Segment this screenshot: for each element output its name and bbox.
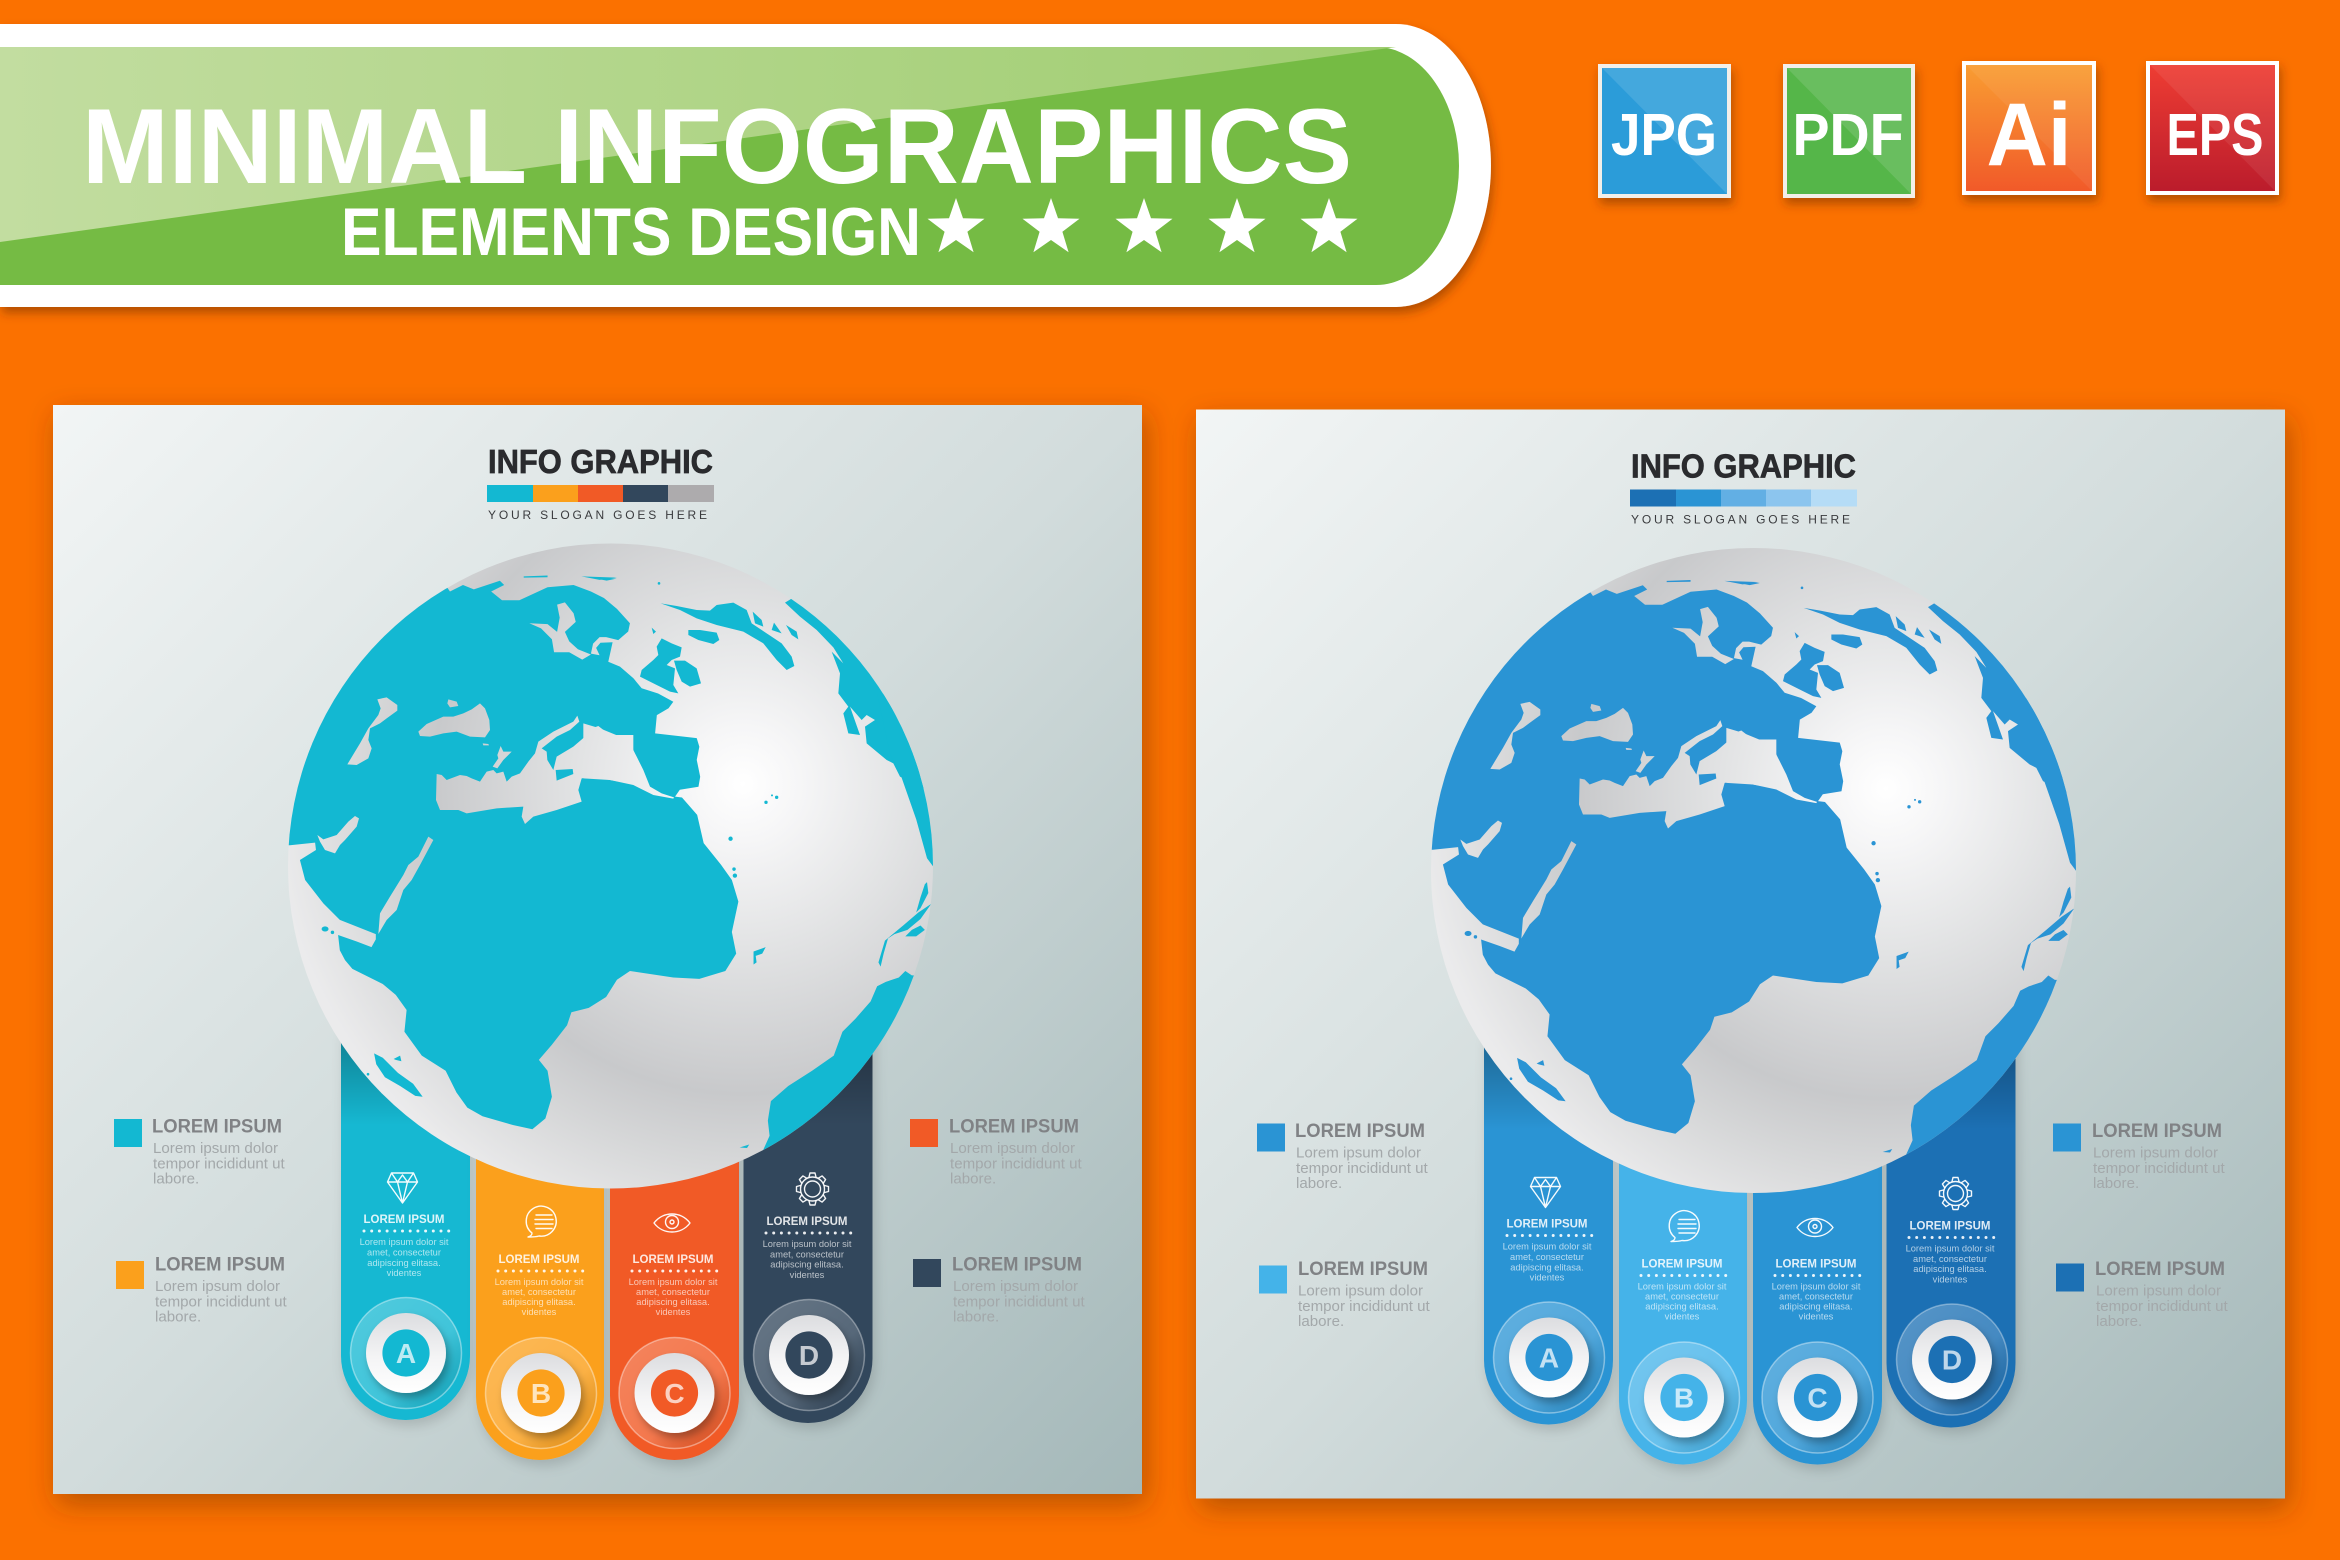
legend item: orange: labore. <box>155 1308 201 1326</box>
badge B <box>1628 1342 1740 1453</box>
icon: eye <box>1797 1218 1833 1236</box>
pill D text <box>1906 1218 1995 1284</box>
legend item: mid blue <box>1257 1121 1429 1192</box>
pill B text: LOREM IPSUM <box>498 1252 580 1266</box>
pill B text: amet, consectetur <box>1645 1292 1719 1302</box>
pill C <box>610 1100 739 1460</box>
legend item: dark blue: LOREM IPSUM <box>2095 1259 2225 1280</box>
panel background <box>53 405 1142 1494</box>
icon: Ai file badge <box>1962 61 2096 195</box>
pill A text: adipiscing elitasa. <box>367 1258 441 1268</box>
pill D text: adipiscing elitasa. <box>1913 1264 1987 1274</box>
banner white frame <box>0 24 1491 307</box>
legend item: teal: LOREM IPSUM <box>152 1116 282 1138</box>
badge C <box>619 1338 730 1448</box>
pill D text <box>763 1214 852 1280</box>
badge A: A <box>396 1338 416 1369</box>
pill D text: videntes <box>790 1270 825 1280</box>
badge B: B <box>1674 1382 1694 1414</box>
pill A text: videntes <box>387 1268 422 1278</box>
icon: diamond <box>1530 1178 1560 1208</box>
pill C text: amet, consectetur <box>636 1287 710 1297</box>
legend item: mid blue: LOREM IPSUM <box>1295 1121 1425 1142</box>
legend item: teal: labore. <box>153 1170 199 1188</box>
legend item: orange: LOREM IPSUM <box>155 1254 285 1276</box>
colour bar <box>487 485 714 502</box>
legend item: orange: tempor incididunt ut <box>155 1294 288 1310</box>
legend item: dark blue: tempor incididunt ut <box>2096 1298 2229 1315</box>
legend item: light blue <box>1259 1259 1431 1330</box>
pill A text <box>1503 1216 1592 1282</box>
badge A <box>350 1298 462 1408</box>
pill A text: Lorem ipsum dolor sit <box>1503 1242 1592 1252</box>
icon: JPG file badge <box>1598 64 1731 198</box>
pill A text: videntes <box>1530 1272 1565 1282</box>
pill C text: amet, consectetur <box>1779 1292 1853 1302</box>
legend item: dark blue: Lorem ipsum dolor <box>2096 1282 2221 1300</box>
pill C <box>1753 1104 1882 1464</box>
pill A <box>341 1030 470 1420</box>
legend item: mid blue: Lorem ipsum dolor <box>1296 1144 1421 1162</box>
pill B text: amet, consectetur <box>502 1287 576 1297</box>
legend item: blue: LOREM IPSUM <box>2092 1121 2222 1142</box>
panel: blue monochrome infographic <box>1196 410 2285 1498</box>
legend item: teal: Lorem ipsum dolor <box>153 1140 278 1157</box>
pill B <box>1619 1104 1747 1464</box>
panel heading: INFO GRAPHIC <box>1631 448 1856 484</box>
badge C <box>1762 1342 1873 1453</box>
legend item: dark blue <box>2056 1259 2229 1330</box>
legend item: blue <box>2053 1121 2226 1192</box>
pill D text: Lorem ipsum dolor sit <box>763 1239 852 1249</box>
badge B: B <box>531 1378 551 1409</box>
pill D text: videntes <box>1933 1274 1968 1284</box>
pill A text <box>360 1212 449 1278</box>
pill A text: adipiscing elitasa. <box>1510 1262 1584 1272</box>
pill C text: adipiscing elitasa. <box>636 1297 710 1307</box>
banner green body <box>0 47 1459 285</box>
legend item: blue: tempor incididunt ut <box>2093 1160 2226 1177</box>
slogan: YOUR SLOGAN GOES HERE <box>488 508 707 522</box>
icon: PDF file badge: PDF <box>1792 102 1904 168</box>
icon: diamond <box>388 1173 418 1203</box>
pill B text <box>1638 1256 1727 1322</box>
pill C text <box>1772 1256 1861 1322</box>
legend item: blue: labore. <box>2093 1175 2139 1192</box>
badge D <box>1896 1304 2008 1415</box>
legend item: teal <box>114 1116 286 1188</box>
legend item: navy: tempor incididunt ut <box>953 1294 1086 1310</box>
colour bar <box>1630 490 1857 506</box>
legend item: orange <box>116 1254 288 1326</box>
panel background <box>1196 410 2285 1498</box>
pill C text: LOREM IPSUM <box>1776 1256 1856 1270</box>
badge B <box>486 1338 596 1448</box>
icon: gear <box>1940 1178 1972 1210</box>
pill C text: LOREM IPSUM <box>632 1252 714 1266</box>
pill C text: videntes <box>1799 1312 1834 1322</box>
icon: speech bubble <box>526 1206 556 1237</box>
globe <box>270 520 986 1197</box>
badge D: D <box>1942 1344 1962 1376</box>
pill B text <box>495 1252 584 1317</box>
pill B text: Lorem ipsum dolor sit <box>1638 1282 1727 1292</box>
icon: Ai file badge: Ai <box>1986 84 2072 184</box>
icon: JPG file badge: JPG <box>1611 102 1717 168</box>
icon: EPS file badge: EPS <box>2166 102 2264 168</box>
pill C text: Lorem ipsum dolor sit <box>629 1277 718 1287</box>
pill B text: adipiscing elitasa. <box>1645 1302 1719 1312</box>
legend item: navy: labore. <box>953 1308 999 1326</box>
panel: teal multicolor infographic <box>53 405 1142 1494</box>
badge A <box>1494 1302 1604 1413</box>
pill D text: LOREM IPSUM <box>766 1214 848 1228</box>
legend item: navy: LOREM IPSUM <box>952 1254 1082 1276</box>
legend item: red <box>910 1116 1083 1188</box>
legend item: red: tempor incididunt ut <box>950 1156 1083 1172</box>
icon: gear <box>796 1173 828 1205</box>
legend item: dark blue: labore. <box>2096 1313 2142 1330</box>
legend item: red: labore. <box>950 1170 996 1188</box>
pill A <box>1484 1034 1613 1424</box>
pill B text: videntes <box>1665 1312 1700 1322</box>
banner gloss <box>0 47 1396 242</box>
legend item: navy: Lorem ipsum dolor <box>953 1278 1078 1295</box>
pill D text: amet, consectetur <box>1913 1254 1987 1264</box>
title banner <box>0 24 1491 307</box>
badge D <box>754 1300 864 1410</box>
legend item: mid blue: labore. <box>1296 1175 1342 1192</box>
badge C: C <box>1807 1382 1828 1414</box>
legend item: light blue: tempor incididunt ut <box>1298 1298 1431 1315</box>
legend item: navy <box>913 1254 1086 1326</box>
badge D: D <box>799 1340 819 1371</box>
pill D <box>744 1030 872 1423</box>
legend item: light blue: LOREM IPSUM <box>1298 1259 1428 1280</box>
pill A text: amet, consectetur <box>367 1248 441 1258</box>
five stars <box>928 198 1358 252</box>
pill C text <box>629 1252 718 1317</box>
pill C text: videntes <box>656 1307 691 1317</box>
legend item: mid blue: tempor incididunt ut <box>1296 1160 1429 1177</box>
globe <box>1413 524 2129 1201</box>
pill A text: Lorem ipsum dolor sit <box>360 1237 449 1247</box>
badge C: C <box>664 1378 685 1409</box>
pill D <box>1886 1034 2016 1428</box>
badge A: A <box>1539 1342 1559 1374</box>
panel heading: INFO GRAPHIC <box>488 443 713 480</box>
pill B text: Lorem ipsum dolor sit <box>495 1277 584 1287</box>
pill A text: amet, consectetur <box>1510 1252 1584 1262</box>
pill C text: Lorem ipsum dolor sit <box>1772 1282 1861 1292</box>
legend item: light blue: labore. <box>1298 1313 1344 1330</box>
pill B <box>476 1100 604 1460</box>
pill D text: Lorem ipsum dolor sit <box>1906 1244 1995 1254</box>
pill A text: LOREM IPSUM <box>1506 1216 1588 1230</box>
legend item: teal: tempor incididunt ut <box>153 1156 286 1172</box>
slogan: YOUR SLOGAN GOES HERE <box>1631 512 1850 526</box>
legend item: red: LOREM IPSUM <box>949 1116 1079 1138</box>
icon: PDF file badge <box>1783 64 1915 198</box>
pill B text: adipiscing elitasa. <box>502 1297 576 1307</box>
pill D text: amet, consectetur <box>770 1250 844 1260</box>
pill A text: LOREM IPSUM <box>364 1212 444 1226</box>
main title: MINIMAL INFOGRAPHICS <box>82 86 1352 206</box>
legend item: orange: Lorem ipsum dolor <box>155 1278 280 1295</box>
pill B text: videntes <box>522 1307 557 1317</box>
icon: eye <box>654 1214 690 1232</box>
icon: EPS file badge <box>2146 61 2279 195</box>
pill B text: LOREM IPSUM <box>1642 1256 1722 1270</box>
legend item: light blue: Lorem ipsum dolor <box>1298 1282 1423 1300</box>
pill D text: LOREM IPSUM <box>1910 1218 1990 1232</box>
legend item: red: Lorem ipsum dolor <box>950 1140 1075 1157</box>
pill C text: adipiscing elitasa. <box>1779 1302 1853 1312</box>
icon: speech bubble <box>1669 1211 1699 1242</box>
subtitle: ELEMENTS DESIGN <box>341 194 921 270</box>
legend item: blue: Lorem ipsum dolor <box>2093 1144 2218 1162</box>
pill D text: adipiscing elitasa. <box>770 1260 844 1270</box>
